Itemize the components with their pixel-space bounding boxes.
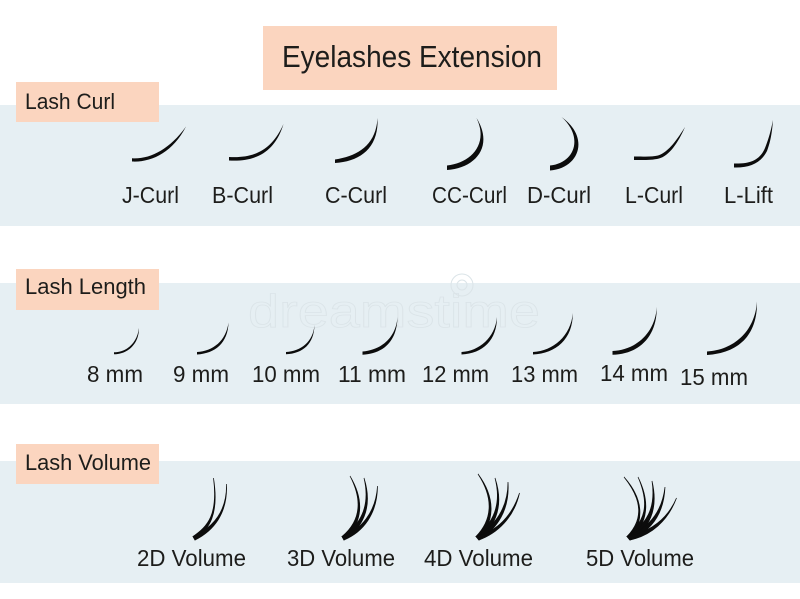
label: 10 mm: 10 mm [252, 361, 320, 387]
lash fan: 3D [342, 476, 378, 540]
title: Eyelashes Extension [282, 39, 542, 74]
tab: lash volume heading [16, 444, 159, 484]
lash: 14 mm [612, 307, 657, 355]
lash: J-Curl [132, 126, 186, 162]
label: L-Lift: L-Lift [724, 182, 774, 208]
label: 11 mm: 11 mm [338, 361, 406, 387]
lash: 9 mm [197, 322, 228, 354]
lash fan: 2D [193, 478, 227, 540]
lash: 15 mm [707, 302, 757, 355]
tab: lash volume heading: Lash Volume [25, 450, 151, 475]
tab: lash curl heading: Lash Curl [25, 89, 115, 114]
label: 12 mm: 12 mm [422, 361, 489, 387]
lash fan: 5D [624, 477, 676, 540]
panel: lash curl [0, 82, 800, 226]
watermark [248, 274, 540, 337]
lash: L-Lift [734, 120, 773, 168]
lash: C-Curl [335, 118, 378, 163]
label: CC-Curl: CC-Curl [432, 182, 507, 208]
lash: 11 mm [362, 317, 398, 355]
lash fan: 4D [476, 474, 520, 540]
lash: 10 mm [286, 325, 314, 354]
tab: lash length heading: Lash Length [25, 274, 146, 299]
watermark: dreamstime [248, 285, 540, 337]
tab: lash curl heading [16, 82, 159, 122]
lash: 12 mm [462, 317, 497, 354]
label: L-Curl: L-Curl [625, 182, 683, 208]
lash: L-Curl [634, 127, 685, 160]
label: 13 mm: 13 mm [511, 361, 578, 387]
tab: lash length heading [16, 269, 159, 310]
lash: CC-Curl [447, 118, 483, 170]
lash: 13 mm [533, 313, 573, 354]
label: 14 mm: 14 mm [600, 360, 668, 386]
label: 9 mm: 9 mm [173, 361, 229, 387]
label: 3D Volume: 3D Volume [287, 545, 395, 571]
label: 2D Volume: 2D Volume [137, 545, 246, 571]
label: J-Curl: J-Curl [122, 182, 179, 208]
panel: lash volume [0, 444, 800, 583]
lash: 8 mm [114, 328, 139, 354]
label: B-Curl: B-Curl [212, 182, 273, 208]
panel: lash length [0, 269, 800, 404]
label: 15 mm: 15 mm [680, 364, 748, 390]
label: 4D Volume: 4D Volume [424, 545, 533, 571]
label: 5D Volume: 5D Volume [586, 545, 694, 571]
label: D-Curl: D-Curl [527, 182, 591, 208]
lash: B-Curl [229, 124, 284, 161]
title [263, 26, 557, 90]
lash: D-Curl [550, 117, 578, 170]
label: C-Curl: C-Curl [325, 182, 387, 208]
label: 8 mm: 8 mm [87, 361, 143, 387]
